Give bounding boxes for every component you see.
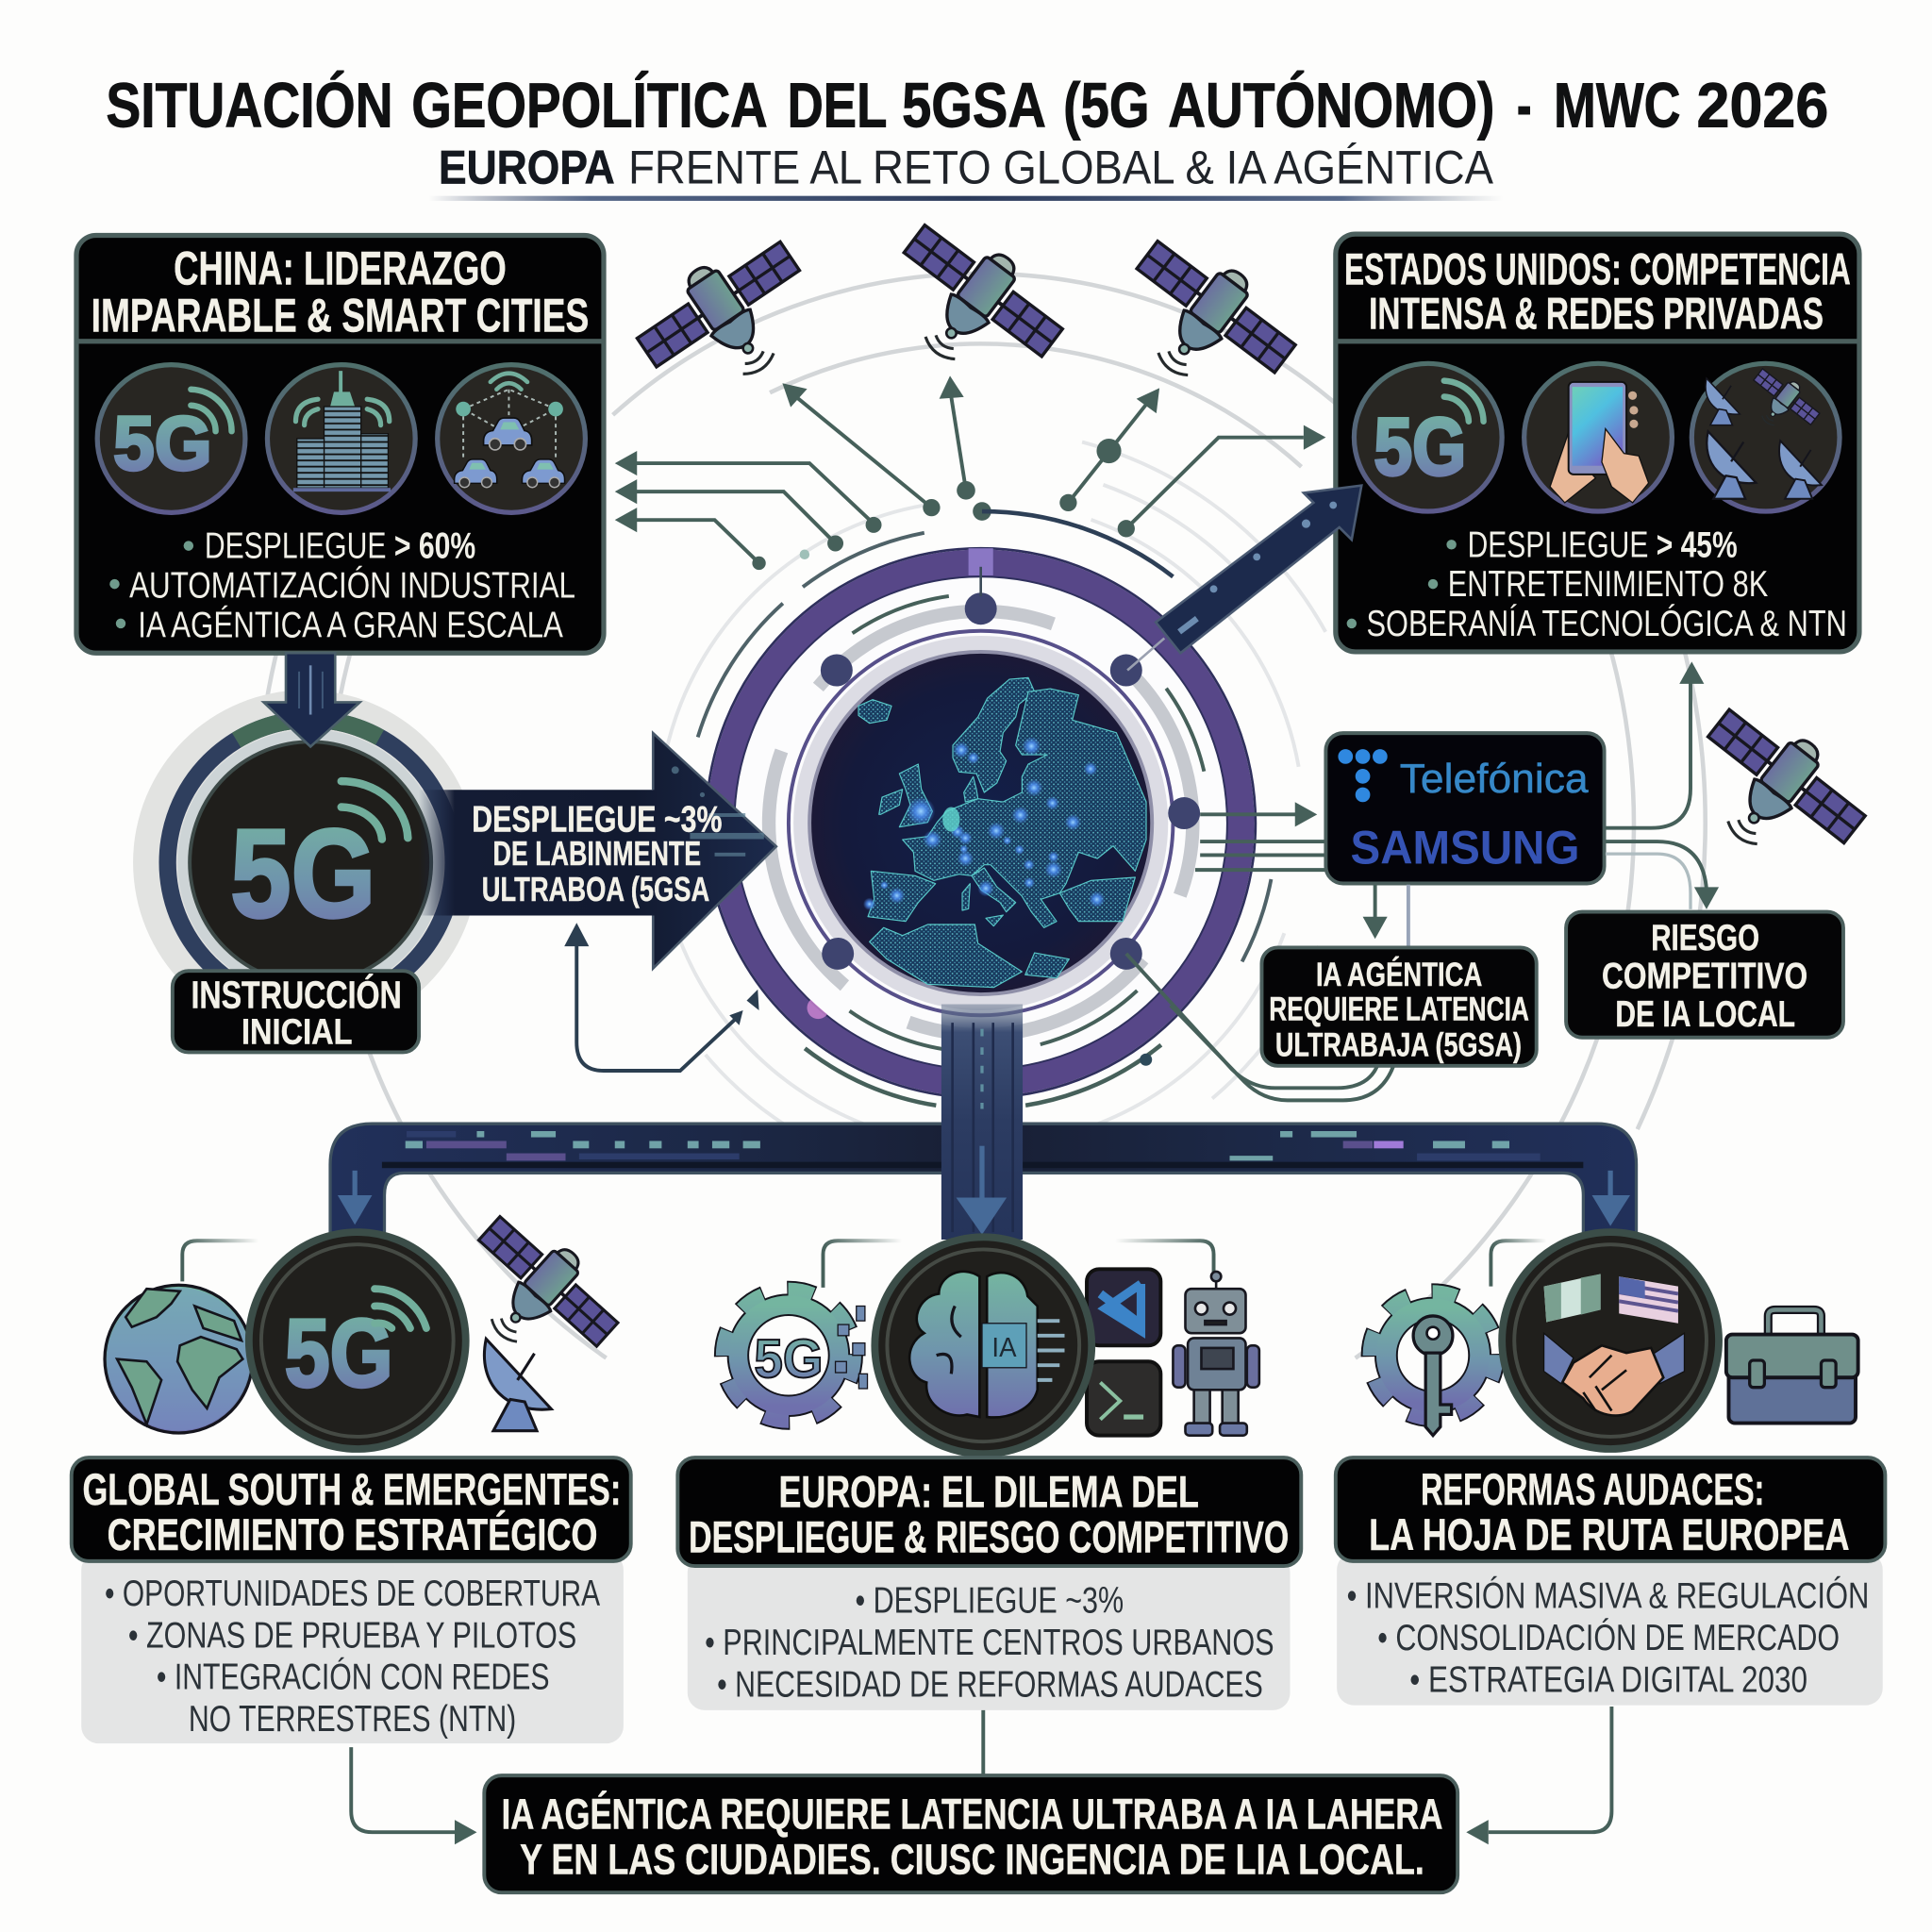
panel: Global South [72,1232,631,1743]
box: riesgo competitivo: DE IA LOCAL [1615,994,1795,1035]
icon: dish [484,1339,551,1431]
arrows to satellites [774,374,1325,537]
arrow: deployment 3% [419,733,776,969]
icon: satellite and dishes [1691,361,1840,511]
heading: Global South: GLOBAL SOUTH & EMERGENTES: [83,1464,621,1514]
panel: Reformas [1336,1232,1885,1706]
icon: connected cars [438,365,585,512]
satellite bottom [441,1201,632,1388]
list: Europa: • NECESIDAD DE REFORMAS AUDACES [717,1665,1263,1706]
connector [1115,1241,1214,1279]
United States bullets: DESPLIEGUE > 45% [1468,525,1738,565]
connector [1491,1241,1546,1287]
China bullets: DESPLIEGUE > 60% [205,526,475,567]
heading: Europa: EUROPA: EL DILEMA DEL [778,1466,1199,1516]
United States heading [1344,244,1851,339]
list: Global South [81,1553,624,1743]
title: SITUACIÓN [106,71,393,142]
icon: 5G United States [1354,363,1502,511]
bar data texture [406,1131,1541,1160]
icon: briefcase [1726,1309,1858,1424]
heading: Europa [677,1457,1301,1566]
icon: handshake and flags [1502,1232,1719,1449]
list: Global South: • INTEGRACIÓN CON REDES [157,1657,550,1698]
icon: globe [105,1285,253,1433]
icon: 5G Global South: 5G [285,1299,393,1407]
box: IA agéntica: REQUIERE LATENCIA [1269,991,1529,1027]
box: Telefónica and Samsung: SAMSUNG [1351,822,1579,874]
arrow: China to hub [264,653,359,747]
icon: 5G United States: 5G [1374,402,1466,492]
title: (5G [1063,72,1150,142]
label: instrucción inicial [173,971,419,1052]
satellite 2 [868,207,1076,405]
title: - [1517,72,1532,142]
China heading [92,242,589,341]
connector [823,1241,902,1288]
label: instrucción inicial: INSTRUCCIÓN [191,973,402,1016]
icon: VS code tile [1087,1269,1160,1345]
icon: robot [1173,1272,1259,1436]
box: Telefónica and Samsung: Telefónica [1400,757,1589,802]
connector lines to Telefónica box [1195,802,1328,870]
list: Reformas: • ESTRATEGIA DIGITAL 2030 [1409,1659,1807,1700]
panel: United States [1336,234,1859,652]
subtitle: EUROPA [439,142,615,194]
box: IA agéntica [1261,947,1537,1066]
United States bullets: ENTRETENIMIENTO 8K [1448,564,1768,605]
connectors to conclusion [351,1707,1611,1844]
United States bullets [1347,525,1847,644]
central globe hub [578,421,1383,1225]
list: Reformas [1337,1553,1883,1706]
arrow to lower-right boxes [1126,954,1395,1100]
box: Telefónica and Samsung [1325,733,1605,883]
satellite 1 [625,223,833,417]
conclusion box: Y EN LAS CIUDADIES. CIUSC INGENCIA DE LIA LOCAL. [520,1836,1424,1884]
list: Global South: NO TERRESTRES (NTN) [189,1699,516,1740]
satellite right [1671,691,1879,891]
list: Europa [688,1555,1291,1710]
arrow: deployment 3%: ULTRABOA (5GSA [482,870,709,908]
box: IA agéntica: ULTRABAJA (5GSA) [1275,1026,1522,1063]
panel: Europa [677,1237,1301,1710]
icon: gear and key [1372,1293,1494,1436]
China heading: CHINA: LIDERAZGO [174,242,507,295]
icon: 5G Global South [249,1232,466,1449]
heading: Global South [72,1457,631,1561]
icon: terminal tile [1087,1361,1160,1436]
central 5G initial instruction hub [116,668,505,1057]
big diagonal arrow to United States [1156,486,1361,653]
connector to IA box [1363,885,1408,949]
connector from box upward to United States [1606,661,1704,828]
icon: 5G China [97,365,245,512]
box: riesgo competitivo [1566,912,1843,1038]
connector to risk box [1606,841,1719,909]
icon: broken gear 5G [724,1291,868,1420]
arrow to deployment arrow [564,923,759,1071]
China bullets: AUTOMATIZACIÓN INDUSTRIAL [129,565,575,606]
central 5G initial instruction hub: 5G [230,804,375,944]
heading: Global South: CRECIMIENTO ESTRATÉGICO [108,1509,597,1559]
China bullets [109,526,575,645]
heading: Reformas [1336,1457,1885,1561]
China bullets: IA AGÉNTICA A GRAN ESCALA [138,605,564,645]
distribution bars [330,1004,1637,1240]
box: IA agéntica: IA AGÉNTICA [1316,956,1482,993]
hub nodes [821,567,1200,970]
satellite 3 [1101,223,1309,421]
box: riesgo competitivo: COMPETITIVO [1602,957,1807,997]
panel: China [76,235,604,653]
conclusion box: IA AGÉNTICA REQUIERE LATENCIA ULTRABA A IA LAHERA [502,1790,1442,1838]
title: 2026 [1697,72,1828,142]
arrow: deployment 3%: DESPLIEGUE ~3% [472,800,722,841]
icon: 5G China: 5G [113,402,212,487]
conclusion box [484,1775,1457,1892]
title [106,71,1828,142]
arrows to China [615,451,882,570]
world map disk [809,652,1152,994]
title: MWC [1554,72,1681,142]
icon: brain: IA [991,1333,1017,1363]
icon: Telefónica dots [1338,749,1388,802]
icon: smart city [267,365,415,512]
icon: phone and hand [1524,363,1672,511]
subtitle: FRENTE AL RETO GLOBAL & IA AGÉNTICA [628,142,1493,194]
list: Global South: • ZONAS DE PRUEBA Y PILOTOS [128,1615,576,1656]
icon: brain [874,1237,1091,1454]
title: AUTÓNOMO) [1168,71,1494,142]
title: GEOPOLÍTICA [411,71,768,142]
heading: Europa: DESPLIEGUE & RIESGO COMPETITIVO [689,1512,1289,1562]
list: Global South: • OPORTUNIDADES DE COBERTURA [105,1574,601,1614]
icon: broken gear 5G: 5G [754,1329,823,1390]
title: 5GSA [902,72,1046,142]
list: Europa: • PRINCIPALMENTE CENTROS URBANOS [705,1623,1274,1663]
heading: Reformas: REFORMAS AUDACES: [1421,1464,1764,1514]
label: instrucción inicial: INICIAL [242,1012,353,1052]
China heading: IMPARABLE & SMART CITIES [92,289,589,341]
connector [182,1241,258,1281]
box: riesgo competitivo: RIESGO [1651,918,1759,958]
arrow: deployment 3%: DE LABINMENTE [492,834,701,873]
title: DEL [788,72,887,142]
list: Europa: • DESPLIEGUE ~3% [855,1581,1124,1622]
